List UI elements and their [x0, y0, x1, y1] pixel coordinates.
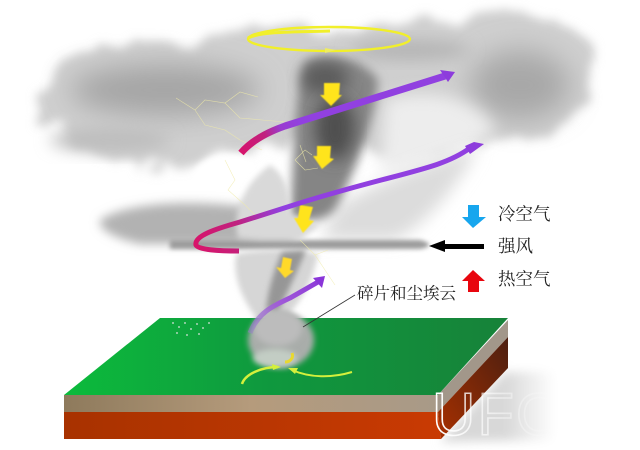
- legend label: strong wind: 强风: [498, 236, 533, 256]
- purple wind arrow 2: [196, 142, 484, 251]
- yellow downward arrow 3: [294, 205, 314, 233]
- legend label: cold air: 冷空气: [498, 204, 551, 224]
- yellow centre swirl: [285, 353, 293, 362]
- legend icon: hot air: [462, 270, 485, 292]
- lightning: [176, 92, 335, 285]
- purple wind arrow 1: [241, 70, 455, 153]
- right side red layer: [438, 337, 508, 439]
- legend icon: cold air: [462, 205, 486, 228]
- debris and dust cloud: [248, 310, 314, 368]
- green inflow arrow left: [242, 364, 281, 384]
- yellow downward arrow 4: [276, 257, 294, 278]
- tornado funnel: [235, 57, 378, 325]
- yellow downward arrow 2: [313, 146, 334, 169]
- watermark: UFO: [432, 381, 565, 448]
- green inflow arrow right: [288, 368, 352, 376]
- upper storm cloud: [38, 18, 592, 209]
- yellow rotation ring: [248, 27, 410, 53]
- leader line: [303, 295, 355, 327]
- ground shadow: [440, 372, 555, 442]
- red rock layer: [64, 412, 441, 439]
- purple wind arrow 3: [250, 276, 325, 333]
- right side tan layer: [438, 320, 508, 412]
- green ground surface: [64, 318, 508, 395]
- middle cloud layer: [100, 148, 478, 249]
- ground block: [64, 318, 508, 439]
- tan soil layer: [64, 395, 438, 412]
- yellow downward arrow 1: [320, 83, 342, 106]
- legend icon: strong wind: [429, 240, 484, 252]
- dust speckles: [172, 322, 210, 336]
- legend label: hot air: 热空气: [498, 269, 551, 289]
- label: debris cloud: 碎片和尘埃云: [357, 284, 456, 303]
